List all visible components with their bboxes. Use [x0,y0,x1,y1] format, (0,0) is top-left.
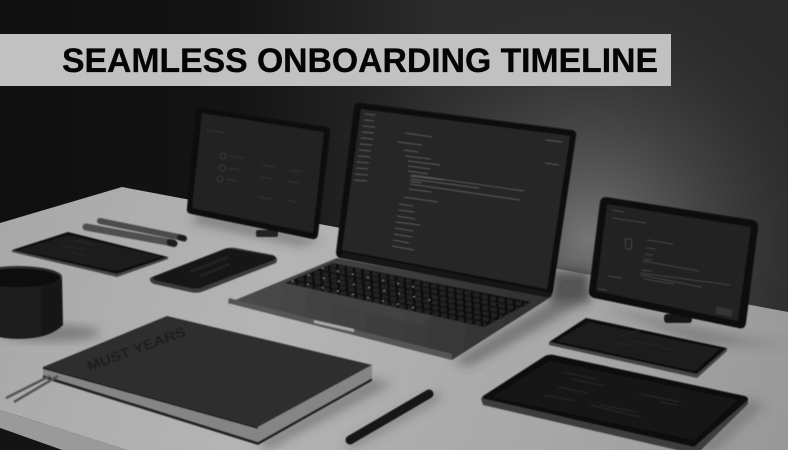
tablet: small left [12,232,168,277]
table [0,187,788,450]
laptop screen [336,103,576,297]
phone [150,248,277,293]
pen: bottom [350,394,436,444]
tablet: large front [481,355,765,450]
tablet: small right [549,318,727,378]
sidebar and code [354,114,562,250]
notebook [6,316,392,450]
keyboard [285,263,531,327]
title: SEAMLESS ONBOARDING TIMELINE [62,42,658,80]
laptop [228,103,590,366]
cup [0,266,100,341]
tablet: upper left [187,108,330,246]
devices and objects [0,103,788,450]
ribbons [6,376,58,402]
title banner [0,34,671,86]
laptop base [228,258,551,360]
cover title: MUST YEARS [85,324,188,374]
tablet: right on stand [589,197,788,345]
pens: upper left [86,221,184,244]
